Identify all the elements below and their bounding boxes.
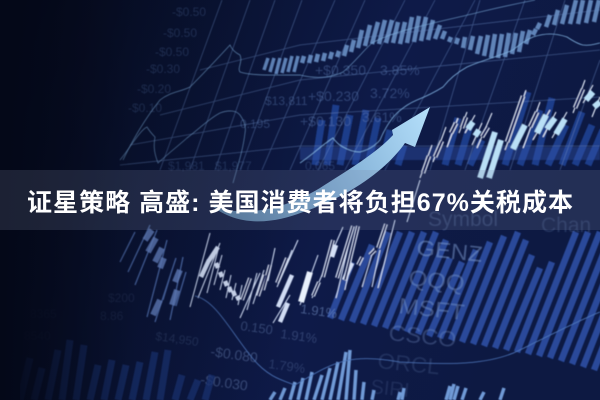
- lower symbols and prices: -$0.030: [200, 371, 249, 394]
- lower right blue bars: [330, 232, 600, 370]
- faded left candlesticks: [120, 225, 186, 322]
- lower symbols and prices: Symbol: [428, 208, 498, 231]
- dim price labels: 3.85%: [380, 62, 420, 78]
- dim price labels: 0.195: [240, 117, 270, 131]
- lower symbols and prices: 8365: [30, 307, 57, 321]
- dim price labels: +$0.350: [315, 62, 366, 78]
- dim price labels: -$0.50: [163, 26, 197, 40]
- hollow candles lower: [242, 224, 386, 300]
- lower symbols and prices: $200: [108, 291, 135, 305]
- faded left candle bodies: [145, 230, 180, 315]
- dim price labels: $1,981: [168, 159, 205, 173]
- upper wicks: [420, 80, 600, 178]
- dim price labels: -$0.50: [172, 5, 206, 19]
- lower symbols and prices: GENZ: [415, 235, 484, 267]
- dim price labels: 3.72%: [370, 85, 410, 101]
- lower symbols and prices: 8540: [24, 329, 51, 343]
- bottom centre light bars: [270, 350, 504, 400]
- bottom left blue bars: [20, 340, 212, 400]
- lower symbols and prices: 1.91%: [300, 301, 339, 321]
- dark left vignette: [0, 0, 300, 400]
- lower symbols and prices: -$0.080: [210, 343, 259, 366]
- dim price labels: -$0.10: [128, 101, 162, 115]
- lower symbols and prices: [24, 208, 591, 400]
- lower symbols and prices: 1.79%: [268, 356, 307, 376]
- dim price labels: -$0.30: [146, 62, 180, 76]
- lower symbols and prices: 8.86: [100, 309, 124, 323]
- lower symbols and prices: Chan: [541, 214, 591, 237]
- growth arrow: [212, 107, 430, 221]
- hollow candles upper: [423, 89, 583, 173]
- dim price labels: $1,977: [215, 159, 252, 173]
- small wave bars near left: [264, 56, 298, 74]
- centre wicks: [190, 180, 420, 323]
- top wave bars: [302, 0, 599, 63]
- faint perspective grid: [120, 0, 600, 170]
- thin trend lines: [120, 0, 600, 385]
- dim price labels: -$0.20: [137, 82, 171, 96]
- lower symbols and prices: 1.91%: [280, 326, 319, 346]
- lower symbols and prices: CSCO: [387, 320, 458, 352]
- dim price labels: -$0.50: [155, 45, 189, 59]
- light blue candles upper: [468, 92, 600, 178]
- dim price labels: +$0.130: [300, 113, 351, 129]
- lower symbols and prices: $14,950: [155, 329, 200, 349]
- horizontal blue band: [300, 147, 600, 160]
- lower symbols and prices: MSFT: [397, 293, 466, 325]
- lower symbols and prices: ORCL: [376, 348, 441, 379]
- dim price labels: +$0.230: [308, 88, 359, 104]
- centre light candle bodies: [201, 245, 352, 322]
- dim price labels: 0.065: [305, 159, 335, 173]
- title banner: [0, 170, 600, 230]
- hollow candle interiors upper: [423, 89, 583, 173]
- hollow candle interiors lower: [242, 224, 386, 300]
- lower symbols and prices: QQQ: [407, 265, 466, 296]
- lower symbols and prices: 0.150: [240, 318, 274, 338]
- title: 证星策略 高盛: 美国消费者将负担67%关税成本: [27, 189, 573, 217]
- blue bars behind upper candles: [315, 92, 600, 165]
- dim price labels: $13,811: [265, 94, 308, 108]
- dim price labels: [128, 5, 420, 173]
- dim price labels: 3.61%: [362, 109, 402, 125]
